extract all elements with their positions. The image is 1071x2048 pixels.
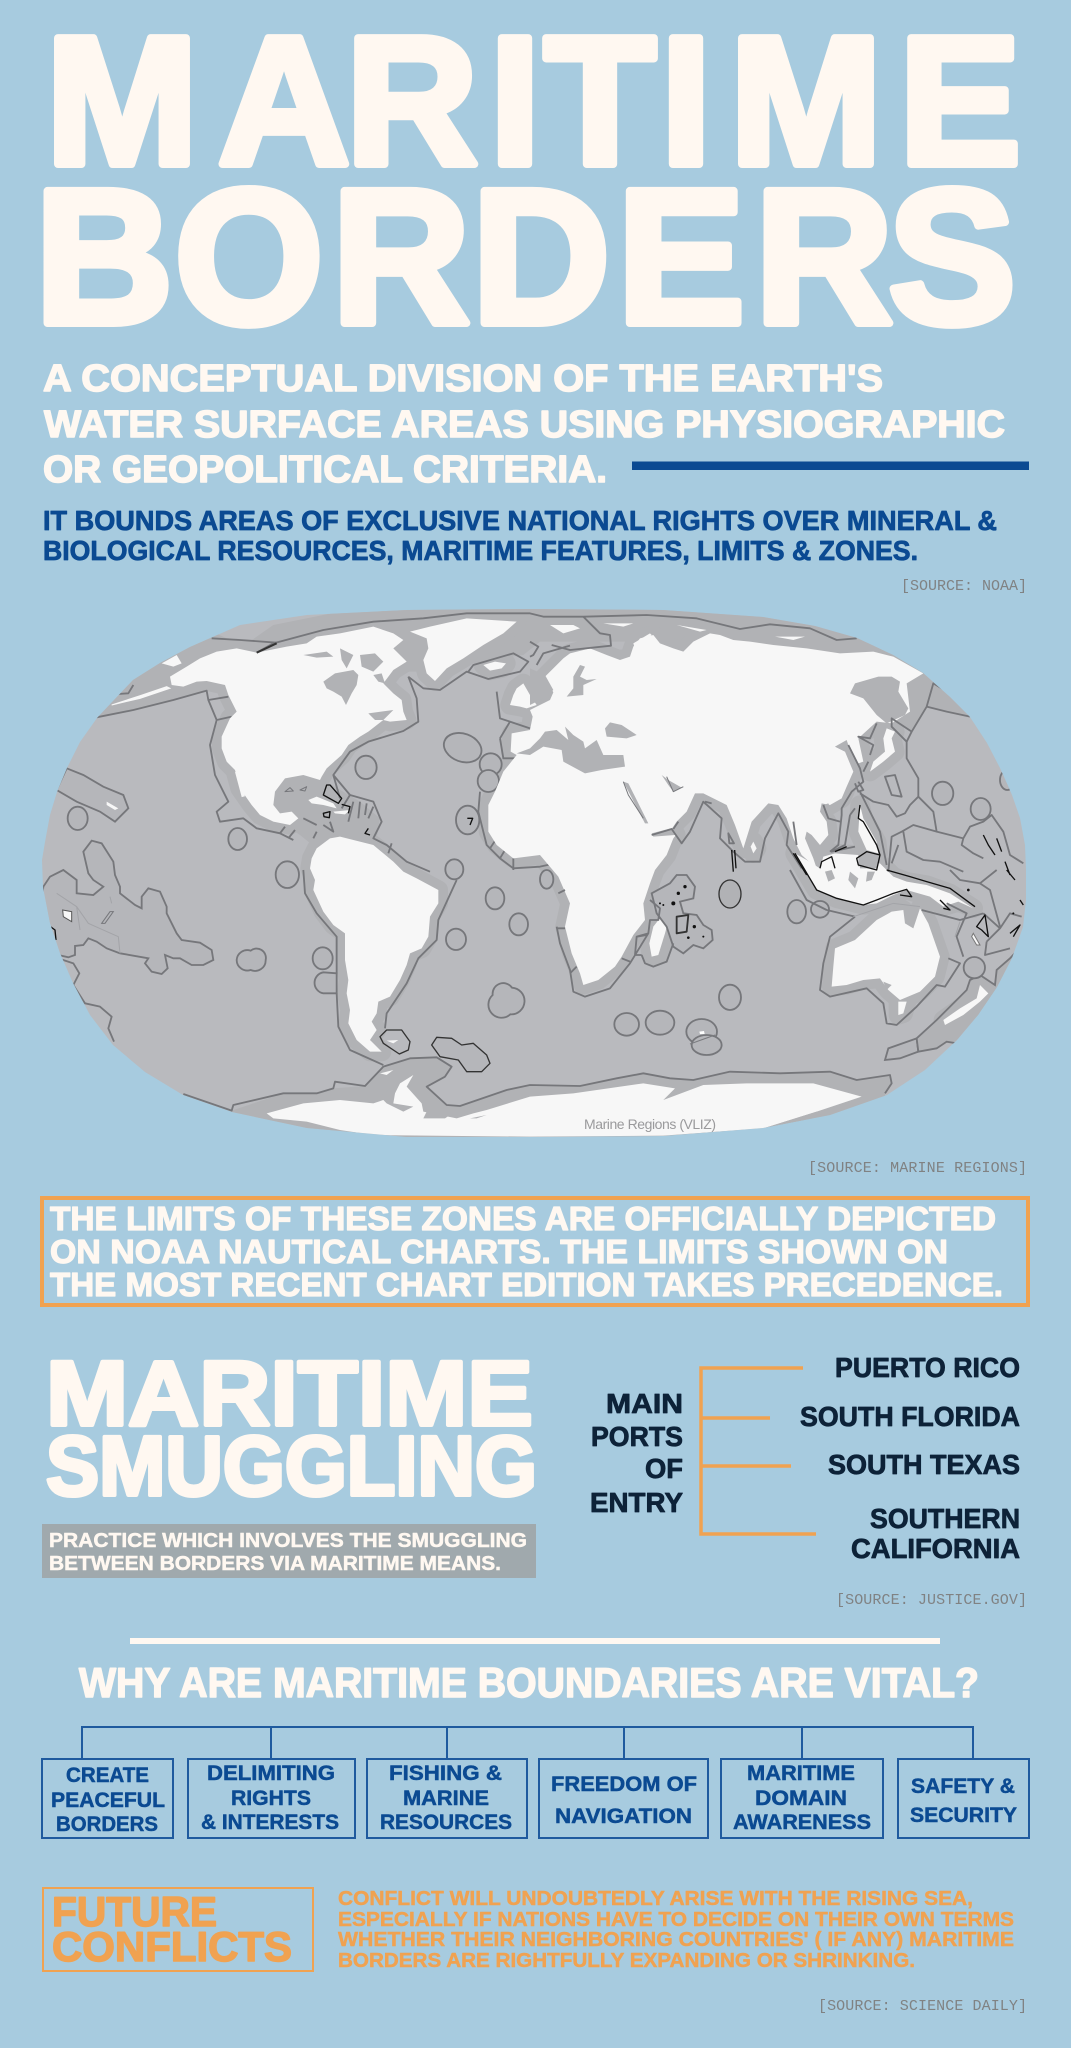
- reason: freedom of navigation: [539, 1759, 708, 1838]
- blue accent bar: [632, 462, 1029, 470]
- reason: maritime domain awareness: AWARENESS: [733, 1811, 871, 1834]
- panel: future conflicts heading: CONFLICTS: [52, 1923, 292, 1970]
- subtitle text: WATER SURFACE AREAS USING PHYSIOGRAPHIC: [44, 404, 1005, 446]
- label: main ports of entry: [590, 1388, 683, 1518]
- reason: maritime domain awareness: MARITIME: [747, 1762, 855, 1785]
- definition text: BIOLOGICAL RESOURCES, MARITIME FEATURES, LIMITS & ZONES.: [43, 535, 918, 566]
- source: Justice.gov: [SOURCE: JUSTICE.GOV]: [836, 1592, 1027, 1609]
- panel: future conflicts heading: [43, 1888, 313, 1971]
- heading: Maritime Smuggling: MARITIME: [46, 1343, 533, 1445]
- atlantic and american EEZ outlines: [97, 691, 295, 840]
- list of ports: SOUTHERN: [870, 1503, 1020, 1534]
- world map of maritime boundaries: [40, 598, 1030, 1170]
- text block: future conflicts: WHETHER THEIR NEIGHBORING COUNTRIES' ( IF ANY) MARITIME: [338, 1929, 1014, 1951]
- label: main ports of entry: PORTS: [591, 1421, 683, 1452]
- list of ports: CALIFORNIA: [851, 1533, 1020, 1564]
- title: Maritime Borders: [35, 0, 1021, 364]
- definition text: [43, 505, 997, 566]
- reason: create peaceful borders: [42, 1759, 173, 1838]
- heading: Maritime Smuggling: SMUGGLING: [46, 1419, 537, 1513]
- panel: future conflicts heading: FUTURE: [52, 1888, 217, 1935]
- source: Marine Regions: [SOURCE: MARINE REGIONS]: [808, 1160, 1027, 1177]
- callout: official limits on NOAA charts: THE MOST RECENT CHART EDITION TAKES PRECEDENCE.: [50, 1266, 1003, 1303]
- arctic and extra land details: [162, 655, 182, 667]
- reason: delimiting rights and interests: RIGHTS: [231, 1787, 311, 1810]
- subtitle text: [43, 358, 1005, 491]
- text block: future conflicts: BORDERS ARE RIGHTFULLY EXPANDING OR SHRINKING.: [338, 1950, 915, 1972]
- reason: safety and security: SAFETY &: [911, 1775, 1015, 1798]
- list of ports: PUERTO RICO: [835, 1352, 1020, 1383]
- text block: future conflicts: CONFLICT WILL UNDOUBTEDLY ARISE WITH THE RISING SEA,: [338, 1888, 973, 1910]
- heading: why boundaries are vital: WHY ARE MARITIME BOUNDARIES ARE VITAL?: [79, 1659, 979, 1706]
- label: main ports of entry: ENTRY: [590, 1487, 683, 1518]
- text block: future conflicts: ESPECIALLY IF NATIONS HAVE TO DECIDE ON THEIR OWN TERMS: [338, 1909, 1014, 1931]
- reason: create peaceful borders: BORDERS: [56, 1813, 158, 1836]
- reason: fishing and marine resources: MARINE: [403, 1787, 489, 1810]
- label: main ports of entry: OF: [645, 1453, 683, 1484]
- panel: smuggling definition: [42, 1524, 536, 1578]
- subtitle text: A CONCEPTUAL DIVISION OF THE EARTH'S: [43, 358, 883, 400]
- callout: official limits on NOAA charts: ON NOAA NAUTICAL CHARTS. THE LIMITS SHOWN ON: [50, 1233, 948, 1270]
- black boundary details in the Caribbean: [323, 785, 350, 818]
- asian and pacific EEZ outlines: [530, 617, 1023, 875]
- source: NOAA: [SOURCE: NOAA]: [901, 578, 1027, 595]
- heading: Maritime Smuggling: [46, 1343, 537, 1513]
- indian ocean, australia and south-east EEZ outlines: [540, 853, 1030, 1060]
- list of ports: SOUTH TEXAS: [828, 1449, 1020, 1480]
- title line: BORDERS: BORDERS: [35, 149, 1016, 364]
- land masses: [170, 618, 988, 1052]
- reason: maritime domain awareness: DOMAIN: [755, 1787, 847, 1810]
- reason: fishing and marine resources: FISHING &: [389, 1762, 502, 1785]
- bracket connecting ports: [701, 1368, 816, 1534]
- reason: create peaceful borders: CREATE: [66, 1764, 149, 1787]
- reason: safety and security: SECURITY: [910, 1804, 1017, 1827]
- callout: official limits on NOAA charts: [42, 1198, 1028, 1305]
- northern shelf areas: [99, 609, 968, 730]
- callout: official limits on NOAA charts: THE LIMITS OF THESE ZONES ARE OFFICIALLY DEPICTED: [50, 1200, 996, 1237]
- reason: delimiting rights and interests: & INTERESTS: [201, 1811, 339, 1834]
- definition text: IT BOUNDS AREAS OF EXCLUSIVE NATIONAL RIGHTS OVER MINERAL &: [43, 505, 997, 536]
- list of ports: [800, 1352, 1020, 1564]
- panel: smuggling definition: PRACTICE WHICH INVOLVES THE SMUGGLING: [49, 1530, 527, 1552]
- shelf bands around land: [170, 618, 988, 1052]
- connector tree: [82, 1727, 973, 1758]
- pacific island zones: [42, 841, 528, 1065]
- Gulf and Caribbean shelf: [284, 784, 380, 842]
- reason: create peaceful borders: PEACEFUL: [51, 1789, 165, 1812]
- cream divider: [130, 1638, 940, 1644]
- reason: delimiting rights and interests: [188, 1759, 355, 1838]
- inland seas and shelves: [303, 648, 918, 990]
- reason: safety and security: [898, 1759, 1029, 1838]
- antarctica and southern ocean: [183, 1029, 892, 1137]
- map credit: Marine Regions (VLIZ): [584, 1116, 716, 1132]
- reason: fishing and marine resources: [367, 1759, 527, 1838]
- reason: fishing and marine resources: RESOURCES: [380, 1811, 512, 1834]
- reason: freedom of navigation: FREEDOM OF: [551, 1773, 697, 1796]
- reason: maritime domain awareness: [721, 1759, 883, 1838]
- list of ports: SOUTH FLORIDA: [800, 1401, 1020, 1432]
- reason: freedom of navigation: NAVIGATION: [555, 1805, 692, 1828]
- text block: future conflicts: [338, 1888, 1014, 1972]
- reason: delimiting rights and interests: DELIMITING: [207, 1762, 335, 1785]
- label: main ports of entry: MAIN: [606, 1388, 683, 1419]
- subtitle text: OR GEOPOLITICAL CRITERIA.: [43, 449, 607, 491]
- panel: smuggling definition: BETWEEN BORDERS VIA MARITIME MEANS.: [49, 1553, 501, 1575]
- source: Science Daily: [SOURCE: SCIENCE DAILY]: [818, 1998, 1027, 2015]
- title line: MARITIME: MARITIME: [46, 0, 1021, 203]
- Gulf small cay outlines: [285, 787, 307, 792]
